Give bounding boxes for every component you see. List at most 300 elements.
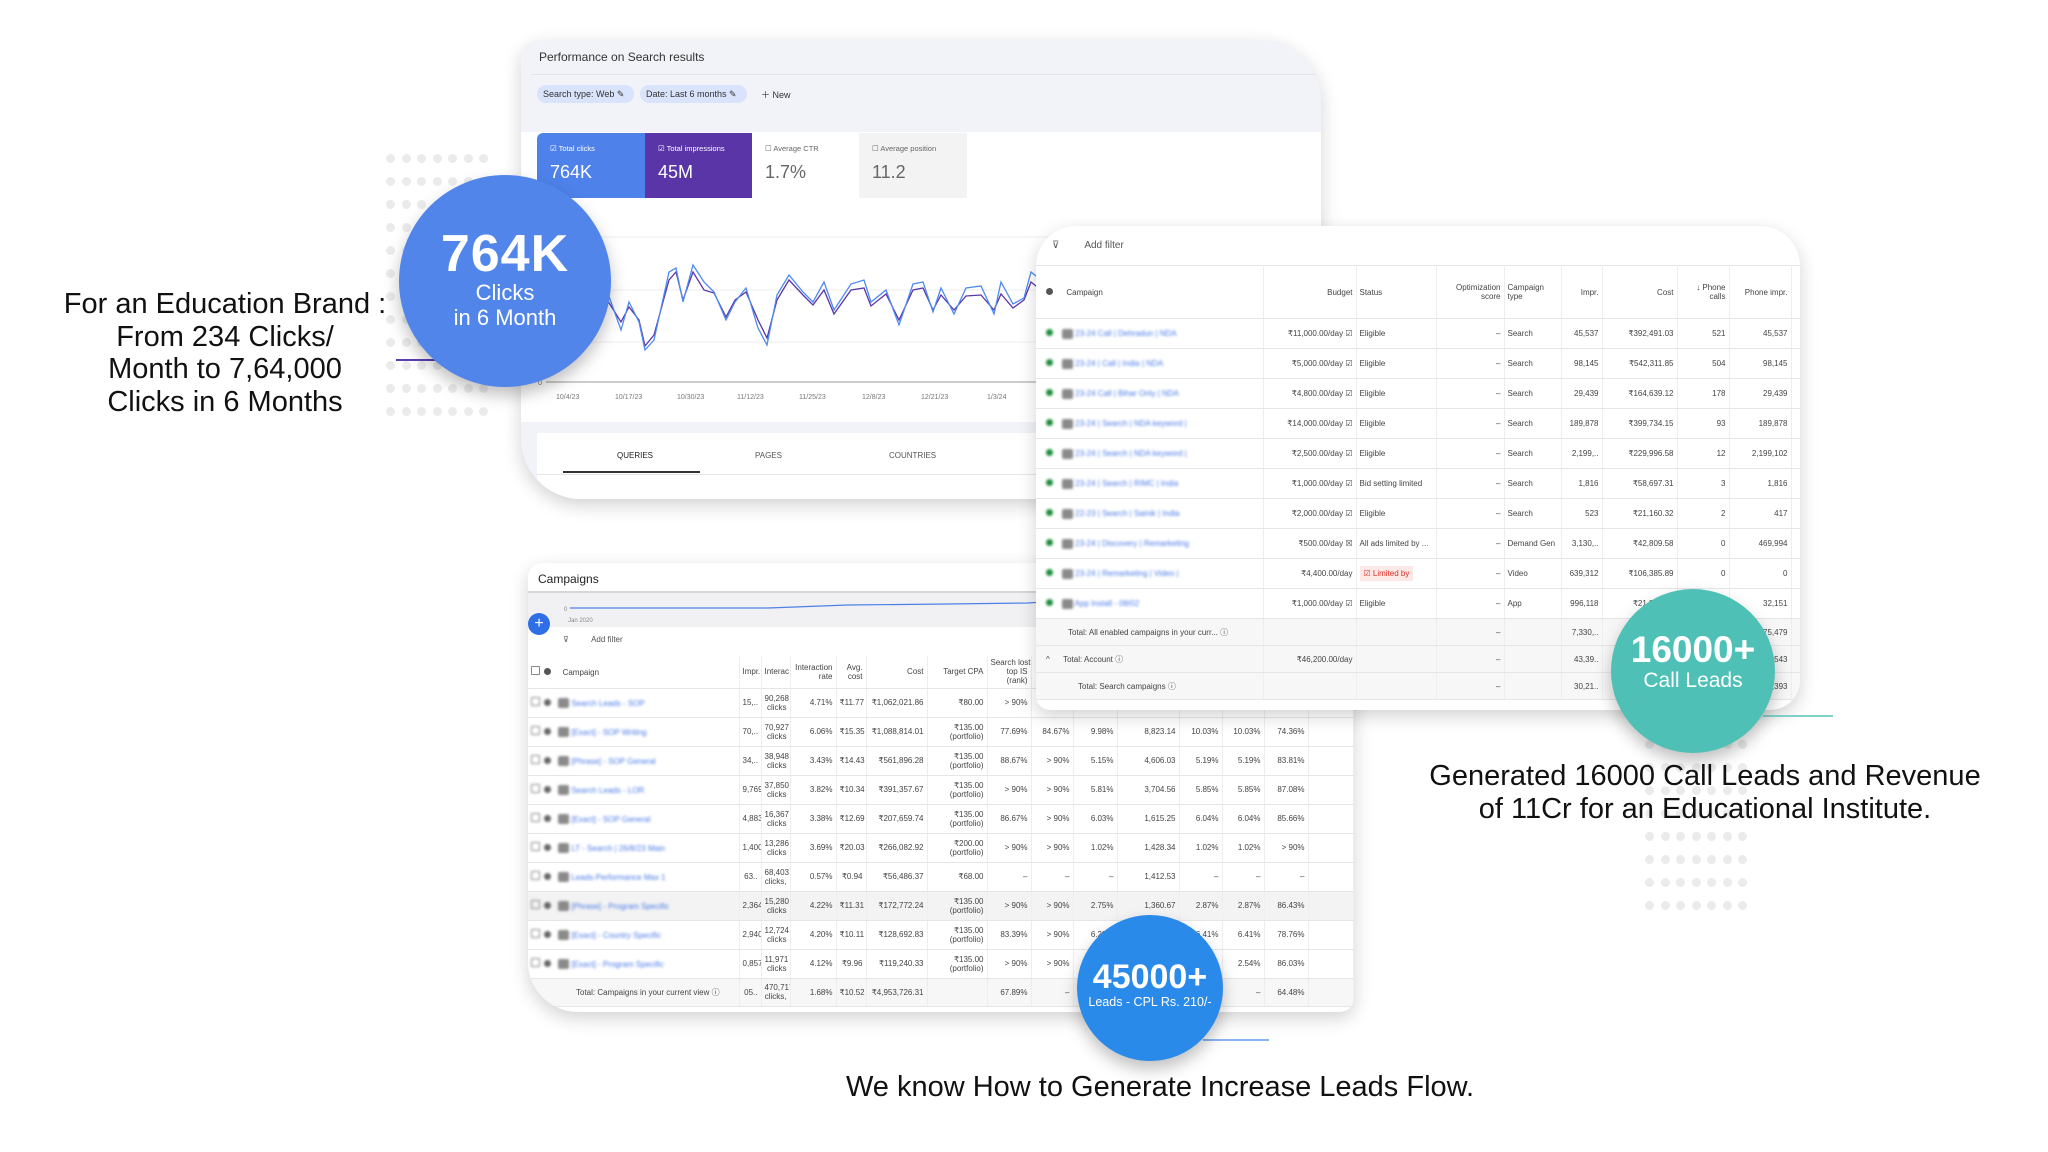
callout circle: 764K clicks: 764K: [441, 225, 569, 283]
table: phone call campaigns: –: [1496, 628, 1500, 636]
table: campaigns: ₹128,692.83: [878, 930, 924, 939]
line chart: 10/4/23: [556, 394, 579, 401]
table: campaigns: 83.39%: [1000, 930, 1028, 939]
table: campaigns: 1,428.34: [1144, 843, 1176, 852]
table: phone call campaigns: Search: [1508, 389, 1533, 398]
table: phone call campaigns: 523: [1585, 509, 1598, 518]
table: campaigns: 78.76%: [1277, 930, 1304, 939]
table: phone call campaigns: ↓ Phone: [1696, 283, 1726, 292]
table: campaigns: (portfolio): [950, 906, 984, 914]
table: phone call campaigns: –: [1496, 449, 1500, 458]
table: campaigns: 1.68%: [810, 988, 832, 996]
table: campaigns: 2.87%: [1196, 901, 1218, 910]
table: phone call campaigns: Eligible: [1360, 509, 1385, 518]
table: phone call campaigns: Demand Gen: [1508, 539, 1555, 548]
table: campaigns: ₹135.00: [954, 810, 984, 818]
table: campaigns: > 90%: [1005, 785, 1028, 794]
table: phone call campaigns: Budget: [1327, 288, 1352, 296]
table: phone call campaigns: 0: [1721, 599, 1726, 608]
table: campaigns: Leads-Performance Max 1: [571, 873, 666, 882]
tabs: QUERIES: [617, 451, 653, 460]
table: phone call campaigns: 23-24 | Remarketing | Video |: [1075, 569, 1179, 578]
table: campaigns: 2.75%: [1091, 901, 1114, 910]
table: campaigns: Interac: [764, 667, 789, 676]
table: campaigns: clicks: [767, 934, 786, 944]
table: campaigns: Search Leads - SOP: [571, 699, 645, 708]
table: phone call campaigns: ₹1,000.00/day ☑: [1292, 479, 1352, 488]
table: phone call campaigns: ₹164,639.12: [1628, 389, 1674, 398]
callout circle: 764K clicks: [399, 175, 611, 387]
table: phone call campaigns: Cost: [1657, 288, 1674, 296]
callout circle: 16000+ call leads: Call Leads: [1643, 669, 1743, 692]
mini chart: 0: [564, 607, 568, 613]
table: campaigns: ₹119,240.33: [879, 959, 924, 968]
table: phone call campaigns: 3,075,543: [1752, 654, 1788, 664]
table: campaigns: 3.82%: [810, 785, 832, 794]
table: campaigns: (portfolio): [950, 790, 984, 798]
table: phone call campaigns: Campaign: [1508, 283, 1544, 292]
table: campaigns: 1.02%: [1196, 843, 1218, 852]
table: campaigns: –: [1214, 872, 1218, 881]
table: campaigns: 4.12%: [810, 959, 832, 968]
panel: search console performance: [521, 40, 1321, 499]
table: campaigns: 4.20%: [810, 930, 832, 939]
table: campaigns: Avg.: [847, 663, 862, 672]
table: phone call campaigns: ₹399,734.15: [1628, 419, 1674, 428]
table: campaigns: ₹15.35: [840, 727, 865, 736]
table: campaigns: –: [1214, 988, 1218, 996]
table: campaigns: clicks: [767, 964, 786, 972]
table: phone call campaigns: 30,21..: [1574, 682, 1598, 690]
table: campaigns: cost: [848, 672, 862, 681]
table: campaigns: clicks: [767, 760, 786, 770]
table: campaigns: 5.19%: [1238, 756, 1260, 765]
table: campaigns: 63..: [744, 872, 758, 881]
table: campaigns: ₹135.00: [954, 752, 984, 760]
filter chips: Date: Last 6 months ✎: [646, 89, 737, 99]
table: campaigns: (portfolio): [950, 848, 984, 856]
table: phone call campaigns: 2,199,102: [1752, 449, 1788, 458]
table: phone call campaigns: ₹2,000.00/day ☑: [1292, 509, 1352, 518]
table: campaigns: ₹20.03: [840, 843, 865, 852]
table: phone call campaigns: 45,537: [1574, 329, 1598, 338]
line chart: 11/25/23: [799, 394, 826, 401]
table: campaigns: –: [1171, 988, 1176, 996]
metric cards: ☐ Average position: [872, 144, 936, 153]
table: campaigns: 3.43%: [810, 756, 832, 765]
table: campaigns: ₹10.11: [840, 930, 864, 939]
table: campaigns: 11,971: [764, 954, 788, 964]
table: phone call campaigns: ₹11,000.00/day ☑: [1288, 329, 1352, 338]
table: phone call campaigns: 178: [1712, 389, 1726, 398]
connector line bottom: [1203, 1039, 1269, 1041]
table: campaigns: clicks: [767, 848, 786, 856]
table: campaigns: ₹391,357.67: [878, 785, 924, 794]
table: phone call campaigns: Search: [1508, 359, 1533, 368]
table: campaigns: 38,948: [764, 752, 789, 760]
table: phone call campaigns: 189,878: [1570, 419, 1598, 428]
line chart: 11/12/23: [737, 394, 764, 401]
table: phone call campaigns: ₹2,500.00/day ☑: [1292, 449, 1352, 458]
table: phone call campaigns: Search: [1508, 449, 1533, 458]
table: phone call campaigns: 23-24 | Discovery | Remarketing: [1075, 539, 1189, 548]
table: campaigns: ₹135.00: [954, 780, 984, 790]
table: campaigns: 4.22%: [810, 901, 832, 910]
table: campaigns: 2.54%: [1238, 959, 1260, 968]
table: campaigns: [Exact] - Country Specific: [571, 931, 661, 940]
table: campaigns: Search lost: [990, 658, 1031, 667]
table: phone call campaigns: –: [1496, 569, 1500, 578]
table: phone call campaigns: Search: [1508, 479, 1533, 488]
table: campaigns: 5.85%: [1238, 785, 1260, 794]
table: campaigns: ₹135.00: [954, 954, 984, 964]
callout circle: 16000+ call leads: [1611, 589, 1775, 753]
table: campaigns: Total: Campaigns in your current view ⓘ: [576, 988, 720, 996]
table: phone call campaigns: 43,39..: [1574, 654, 1598, 664]
table: phone call campaigns: ₹1,978,597.14: [1622, 628, 1674, 636]
table: campaigns: 2.50%: [1091, 959, 1114, 968]
table: campaigns: [Phrase] - Program Specific: [571, 902, 669, 911]
table: campaigns: clicks: [767, 732, 786, 740]
table: phone call campaigns: 2: [1721, 509, 1726, 518]
table: phone call campaigns: 23-24 | Search | NDA keyword |: [1075, 449, 1187, 458]
table: campaigns: clicks: [767, 906, 786, 914]
table: campaigns: 1,210.11: [1145, 930, 1176, 939]
table: campaigns: ₹1,062,021.86: [872, 698, 924, 707]
table: phone call campaigns: ₹542,311.85: [1629, 359, 1674, 368]
table: campaigns: clicks: [767, 790, 786, 798]
table: campaigns: rate: [819, 672, 832, 681]
table: campaigns: –: [1065, 988, 1070, 996]
table: phone call campaigns: [1036, 265, 1800, 700]
table: phone call campaigns: 29,439: [1574, 389, 1598, 398]
text block: call leads revenue: of 11Cr for an Educational Institute.: [1479, 792, 1931, 824]
table: phone call campaigns: 3: [1721, 479, 1726, 488]
table: phone call campaigns: ₹392,491.03: [1628, 329, 1674, 338]
table: phone call campaigns: ₹1,000.00/day ☑: [1292, 599, 1352, 608]
table: phone call campaigns: –: [1496, 654, 1500, 664]
callout circle: 45000+ leads: [1077, 915, 1223, 1061]
text block: call leads revenue: Generated 16000 Call Leads and Revenue: [1429, 760, 1981, 792]
table: campaigns: [Exact] - Program Specific: [571, 960, 664, 969]
mini chart: Jan 2020: [568, 618, 593, 624]
line chart: [538, 236, 1049, 401]
table: phone call campaigns: 1,313: [1705, 654, 1726, 664]
table: campaigns: 3.38%: [810, 814, 832, 823]
table: campaigns: 37,850: [764, 780, 789, 790]
table: campaigns: 84.67%: [1042, 727, 1070, 736]
table: phone call campaigns: score: [1481, 292, 1500, 301]
table: phone call campaigns: 521: [1712, 329, 1726, 338]
table: phone call campaigns: Search: [1508, 329, 1533, 338]
table: phone call campaigns: 3,130,..: [1572, 539, 1598, 548]
table: campaigns: 3.69%: [810, 843, 832, 852]
table: campaigns: Campaign: [563, 668, 599, 677]
table: phone call campaigns: ₹21,372.10: [1633, 599, 1674, 608]
panel: call campaigns table: [1036, 226, 1800, 710]
table: campaigns: ₹68.00: [958, 872, 984, 881]
add filter: ⊽ Add filter: [1052, 240, 1124, 251]
table: campaigns: clicks: [767, 702, 786, 712]
text block: education brand: [64, 288, 386, 418]
table: campaigns: 1,615.25: [1144, 814, 1176, 823]
tabs: COUNTRIES: [889, 451, 936, 460]
table: campaigns: ₹135.00: [954, 722, 984, 732]
table: phone call campaigns: 1,313: [1705, 682, 1726, 690]
table: campaigns: ₹56,486.37: [883, 872, 924, 881]
table: phone call campaigns: 2,573,393: [1752, 682, 1788, 690]
table: campaigns: 9.98%: [1091, 727, 1114, 736]
table: phone call campaigns: ₹14,000.00/day ☑: [1287, 419, 1352, 428]
table: campaigns: (portfolio): [950, 934, 984, 944]
table: phone call campaigns: 93: [1717, 419, 1726, 428]
table: campaigns: > 90%: [1047, 930, 1070, 939]
table: campaigns: clicks,: [765, 992, 786, 1001]
table: campaigns: > 90%: [1047, 901, 1070, 910]
table: phone call campaigns: 0: [1721, 569, 1726, 578]
table: campaigns: Search Leads - LOR: [571, 786, 644, 795]
table: phone call campaigns: –: [1496, 539, 1500, 548]
filter chips: [537, 85, 791, 103]
table: campaigns: –: [1109, 988, 1114, 996]
table: phone call campaigns: 23-24 | Search | NDA keyword |: [1075, 419, 1187, 428]
table: campaigns: 2.54%: [1196, 959, 1218, 968]
table: campaigns: > 90%: [1047, 814, 1070, 823]
table: phone call campaigns: Eligible: [1360, 599, 1385, 608]
text block: education brand: Month to 7,64,000: [108, 353, 342, 385]
table: campaigns: –: [1300, 872, 1304, 881]
table: phone call campaigns: –: [1496, 479, 1500, 488]
table: campaigns: 6.41%: [1238, 930, 1260, 939]
table: campaigns: 15,280: [764, 896, 789, 906]
table: phone call campaigns: 12: [1717, 449, 1726, 458]
table: phone call campaigns: –: [1496, 509, 1500, 518]
table: campaigns: 64.48%: [1277, 988, 1304, 996]
table: phone call campaigns: 22-23 | Search | Sainik | India: [1075, 509, 1180, 518]
table: phone call campaigns: Total: Search campaigns ⓘ: [1078, 682, 1176, 690]
table: phone call campaigns: Phone impr.: [1745, 288, 1788, 296]
table: phone call campaigns: 98,145: [1763, 359, 1788, 368]
table: campaigns: ₹207,659.74: [878, 814, 924, 823]
table: phone call campaigns: –: [1496, 389, 1500, 398]
table: campaigns: 6.41%: [1196, 930, 1218, 939]
table: phone call campaigns: 2,199,..: [1572, 449, 1598, 458]
table: campaigns: –: [1065, 872, 1070, 881]
table: campaigns: –: [1109, 872, 1114, 881]
table: campaigns: 6.03%: [1091, 814, 1114, 823]
heading: campaigns: Campaigns: [538, 572, 599, 586]
table: phone call campaigns: Eligible: [1360, 359, 1385, 368]
icon: plus button: [528, 613, 550, 635]
table: phone call campaigns: calls: [1709, 292, 1726, 301]
table: phone call campaigns: 45,537: [1763, 329, 1788, 338]
table: phone call campaigns: 417: [1774, 509, 1788, 518]
line chart: 12/8/23: [862, 394, 885, 401]
table: phone call campaigns: –: [1496, 359, 1500, 368]
tabs: [537, 433, 1321, 499]
table: phone call campaigns: 1,816: [1767, 479, 1788, 488]
table: campaigns: ₹4,953,726.31: [872, 988, 924, 996]
table: phone call campaigns: ☑ Limited by: [1364, 569, 1409, 578]
table: phone call campaigns: Optimization: [1456, 283, 1500, 292]
table: campaigns: ₹11.77: [840, 698, 864, 707]
line chart: 0: [538, 380, 542, 387]
table: phone call campaigns: 189,878: [1759, 419, 1788, 428]
table: campaigns: 6.06%: [810, 727, 832, 736]
table: phone call campaigns: Eligible: [1360, 389, 1385, 398]
panel: google ads campaigns: [528, 563, 1354, 1012]
table: phone call campaigns: –: [1496, 329, 1500, 338]
table: phone call campaigns: ₹21,160.32: [1633, 509, 1674, 518]
table: campaigns: 1.02%: [1091, 843, 1114, 852]
table: campaigns: ₹10.34: [840, 785, 865, 794]
table: phone call campaigns: ₹46,200.00/day: [1297, 654, 1352, 664]
table: phone call campaigns: 1,313: [1705, 628, 1726, 636]
table: campaigns: ₹11.31: [840, 901, 864, 910]
table: campaigns: 74.36%: [1277, 727, 1304, 736]
table: phone call campaigns: 504: [1712, 359, 1726, 368]
table: campaigns: > 90%: [1047, 959, 1070, 968]
table: phone call campaigns: type: [1508, 292, 1523, 301]
table: campaigns: ₹200.00: [954, 838, 984, 848]
table: campaigns: 1.02%: [1238, 843, 1260, 852]
table: phone call campaigns: ₹4,800.00/day ☑: [1292, 389, 1352, 398]
table: campaigns: 0.57%: [810, 872, 832, 881]
table: campaigns: 1,180.40: [1144, 959, 1176, 968]
callout circle: 45000+ leads: 45000+: [1093, 958, 1207, 996]
table: campaigns: –: [1256, 988, 1260, 996]
table: campaigns: ₹10.52: [840, 988, 865, 996]
table: campaigns: (portfolio): [950, 964, 984, 972]
table: campaigns: 85.66%: [1277, 814, 1304, 823]
table: phone call campaigns: ₹58,697.31: [1633, 479, 1674, 488]
table: phone call campaigns: ₹229,996.58: [1628, 449, 1674, 458]
table: phone call campaigns: 1,816: [1578, 479, 1598, 488]
table: campaigns: (portfolio): [950, 760, 984, 770]
table: phone call campaigns: 7,330,..: [1572, 628, 1598, 636]
table: campaigns: 4.71%: [810, 698, 832, 707]
table: campaigns: 88.67%: [1000, 756, 1028, 765]
table: campaigns: [528, 656, 1354, 1007]
table: phone call campaigns: Total: All enabled campaigns in your curr... ⓘ: [1068, 628, 1228, 636]
table: campaigns: [Phrase] - SOP General: [571, 757, 656, 766]
filter chips: Search type: Web ✎: [543, 89, 624, 99]
table: campaigns: ₹14.43: [840, 756, 865, 765]
line chart: 12/21/23: [921, 394, 948, 401]
table: phone call campaigns: Impr.: [1581, 288, 1598, 296]
table: campaigns: ₹561,896.28: [878, 756, 924, 765]
table: campaigns: Cost: [907, 667, 924, 676]
table: phone call campaigns: 29,439: [1763, 389, 1788, 398]
table: campaigns: > 90%: [1047, 843, 1070, 852]
table: phone call campaigns: 996,118: [1570, 599, 1598, 608]
table: phone call campaigns: ₹42,809.58: [1633, 539, 1674, 548]
table: phone call campaigns: 98,145: [1574, 359, 1598, 368]
table: phone call campaigns: –: [1496, 682, 1500, 690]
table: phone call campaigns: ₹4,400.00/day: [1301, 569, 1352, 578]
table: campaigns: 87.08%: [1277, 785, 1304, 794]
table: campaigns: Impr.: [742, 667, 760, 676]
table: campaigns: ₹12.69: [840, 814, 865, 823]
table: campaigns: 05..: [744, 988, 758, 996]
table: campaigns: Target CPA: [943, 667, 984, 676]
table: campaigns: 2.87%: [1238, 901, 1260, 910]
table: phone call campaigns: ₹1,808,640.31: [1622, 682, 1674, 690]
table: phone call campaigns: 23-24 | Call | India | NDA: [1075, 359, 1163, 368]
table: campaigns: ₹266,082.92: [878, 843, 924, 852]
table: phone call campaigns: 0: [1783, 569, 1788, 578]
connector line right: [1763, 715, 1833, 717]
table: campaigns: –: [1256, 872, 1260, 881]
table: campaigns: > 90%: [1047, 756, 1070, 765]
table: campaigns: 70,927: [764, 722, 789, 732]
table: phone call campaigns: Video: [1508, 569, 1528, 578]
table: campaigns: 4,606.03: [1144, 756, 1176, 765]
table: campaigns: 86.43%: [1277, 901, 1304, 910]
table: phone call campaigns: 0: [1721, 539, 1726, 548]
table: campaigns: 8,823.14: [1144, 727, 1176, 736]
table: campaigns: > 90%: [1282, 843, 1304, 852]
line chart: 10/30/23: [677, 394, 704, 401]
table: campaigns: 10.03%: [1233, 727, 1260, 736]
text block: education brand: Clicks in 6 Months: [107, 386, 343, 418]
table: campaigns: clicks: [767, 818, 786, 828]
table: phone call campaigns: ₹500.00/day ☒: [1298, 539, 1352, 548]
callout circle: 764K clicks: Clicks: [476, 280, 534, 305]
dot pattern right: [1645, 740, 1747, 910]
table: campaigns: LT - Search | 26/8/23 Main: [571, 844, 665, 853]
table: campaigns: > 90%: [1005, 901, 1028, 910]
table: campaigns: 3,704.56: [1144, 785, 1176, 794]
tabs: PAGES: [755, 451, 782, 460]
table: campaigns: ₹80.00: [958, 698, 984, 707]
table: campaigns: ₹172,772.24: [878, 901, 924, 910]
table: phone call campaigns: 3,075,479: [1752, 628, 1788, 636]
table: phone call campaigns: ₹106,385.89: [1628, 569, 1674, 578]
metric cards: 11.2: [872, 162, 906, 182]
table: campaigns: 6.29%: [1091, 930, 1114, 939]
metric cards: ☑ Total clicks: [550, 144, 595, 153]
table: phone call campaigns: Eligible: [1360, 329, 1385, 338]
table: phone call campaigns: Campaign: [1066, 288, 1103, 296]
table: campaigns: ₹9.96: [842, 959, 862, 968]
callout circle: 45000+ leads: Leads - CPL Rs. 210/-: [1088, 995, 1212, 1009]
table: phone call campaigns: Search: [1508, 419, 1533, 428]
table: phone call campaigns: Eligible: [1360, 449, 1385, 458]
table: campaigns: 5.81%: [1091, 785, 1114, 794]
table: campaigns: > 90%: [1005, 843, 1028, 852]
table: phone call campaigns: 23-24 | Search | RIMC | India: [1075, 479, 1178, 488]
table: campaigns: 34,..: [742, 756, 758, 765]
table: campaigns: 6.04%: [1196, 814, 1218, 823]
table: phone call campaigns: Eligible: [1360, 419, 1385, 428]
table: phone call campaigns: Search: [1508, 509, 1533, 518]
table: campaigns: Interaction: [795, 663, 832, 672]
table: campaigns: > 90%: [1005, 959, 1028, 968]
metric cards: ☑ Total impressions: [658, 144, 725, 153]
table: campaigns: 10.03%: [1191, 727, 1218, 736]
table: phone call campaigns: 32,151: [1763, 599, 1788, 608]
table: campaigns: ₹0.94: [842, 872, 862, 881]
text block: education brand: From 234 Clicks/: [116, 320, 334, 352]
connector line left: [396, 359, 498, 361]
table: campaigns: 77.69%: [1000, 727, 1028, 736]
table: campaigns: 13,286: [764, 838, 789, 848]
table: phone call campaigns: 639,312: [1570, 569, 1598, 578]
table: campaigns: –: [1023, 872, 1028, 881]
metric cards: 764K: [550, 162, 592, 182]
table: campaigns: 68,403: [764, 868, 789, 876]
